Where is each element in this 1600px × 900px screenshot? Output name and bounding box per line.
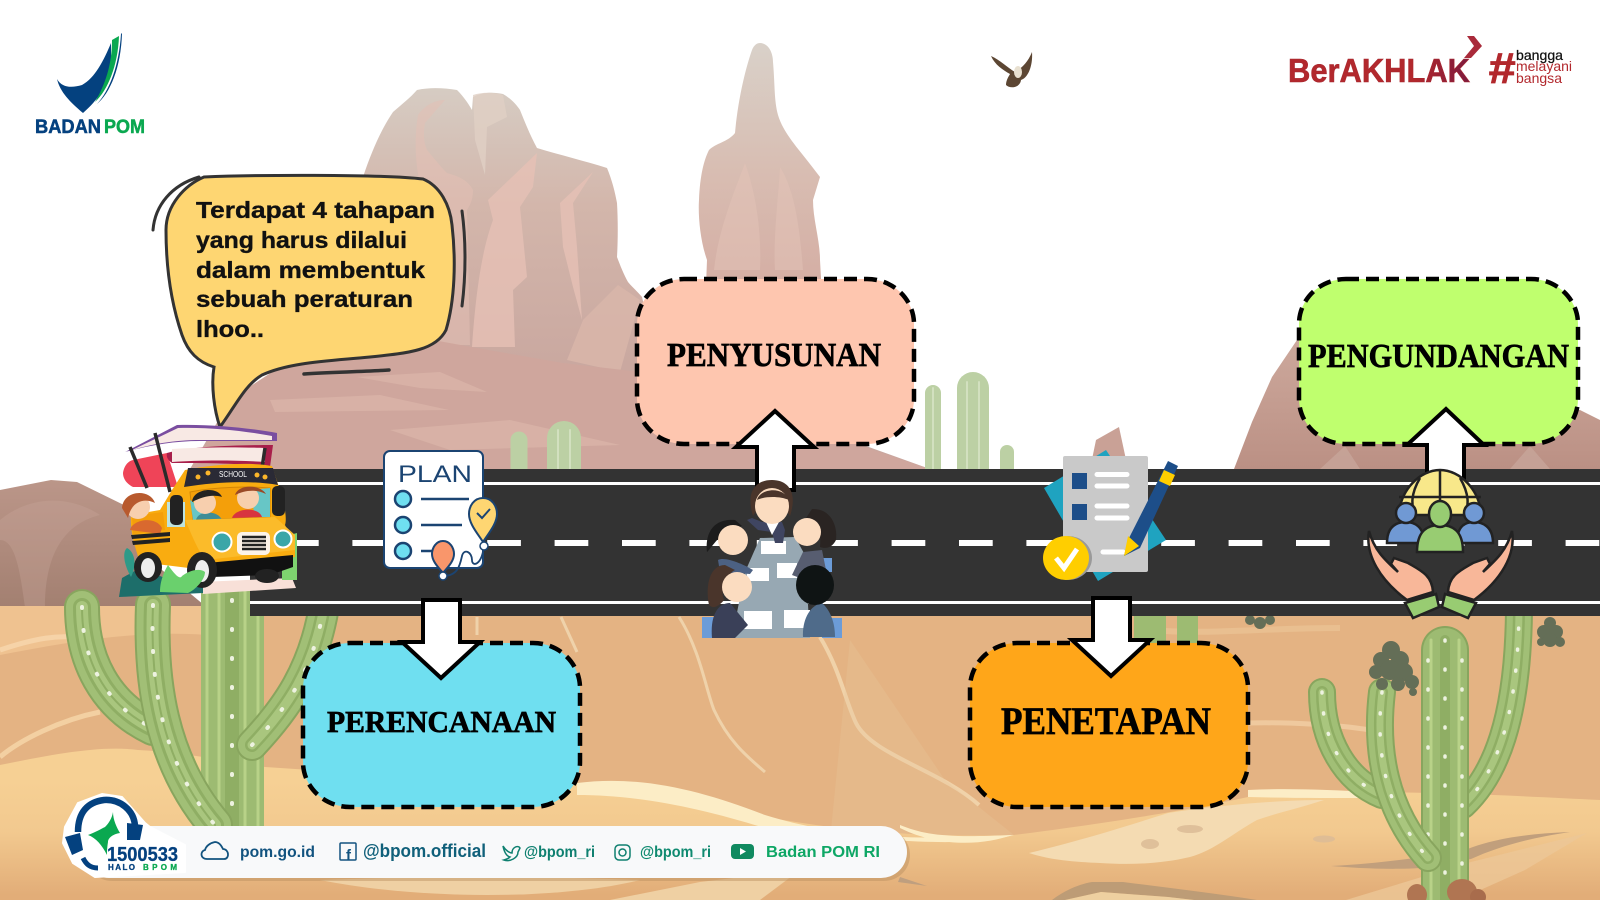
icon: school bus with books: SCHOOL [219, 470, 247, 479]
box: pengundangan [1299, 279, 1578, 444]
icon: facebook [340, 843, 356, 864]
background: far cacti [519, 382, 1007, 480]
box: pengundangan: PENGUNDANGAN [1308, 338, 1569, 375]
icon: instagram [615, 845, 630, 860]
bubble text [196, 197, 435, 342]
bubble text: lhoo.. [196, 316, 264, 342]
hotline logo: HALO [108, 863, 135, 872]
instagram handle: @bpom_ri [640, 844, 711, 861]
website: pom.go.id [240, 844, 315, 861]
logo: berakhlak: # [1488, 44, 1516, 93]
speech bubble [153, 175, 465, 427]
logo: berakhlak: melayani [1516, 58, 1572, 74]
big cactus: left [82, 590, 325, 840]
icon: hands holding public [1368, 470, 1513, 618]
hotline logo [63, 794, 185, 877]
logo: berakhlak: BerAKHLAK [1288, 52, 1470, 89]
icon: cloud [201, 842, 228, 859]
icon: checklist document and pen [1043, 450, 1178, 581]
box: penyusunan [637, 279, 914, 444]
road [250, 469, 1600, 616]
bubble text: sebuah peraturan [196, 286, 413, 312]
icon: flying bird [991, 52, 1032, 87]
hotline logo: 1500533 [107, 844, 178, 866]
box: penyusunan: PENYUSUNAN [667, 337, 881, 374]
box: perencanaan: PERENCANAAN [327, 704, 556, 739]
arrow: plan to perencanaan [402, 600, 480, 678]
facebook handle: @bpom.official [363, 841, 486, 861]
box: penetapan [970, 643, 1248, 807]
background: left rock [0, 480, 210, 612]
logo: berakhlak: bangga [1516, 47, 1563, 63]
box: perencanaan [303, 643, 580, 807]
background: right rocks [1090, 300, 1600, 469]
icon: facebook: f [346, 847, 352, 864]
icon: school bus with books [119, 425, 297, 597]
shrubs [1134, 615, 1565, 696]
icon: twitter [503, 846, 520, 861]
arrow: meeting to penyusunan [736, 411, 814, 490]
logo: badan pom: BADAN [35, 117, 101, 138]
arrow: public to pengundangan [1407, 409, 1484, 480]
icon: plan checklist: PLAN [398, 461, 472, 488]
arrow: checklist to penetapan [1072, 598, 1150, 676]
box: penetapan: PENETAPAN [1001, 700, 1211, 743]
twitter handle: @bpom_ri [524, 844, 595, 861]
big cactus: right [1322, 610, 1519, 900]
logo: berakhlak: bangsa [1516, 70, 1562, 86]
bubble text: Terdapat 4 tahapan [196, 197, 435, 223]
icon: youtube [731, 844, 754, 859]
youtube channel: Badan POM RI [766, 844, 880, 861]
icon: plan checklist [384, 451, 497, 580]
background: rock spire [699, 43, 830, 440]
footer contact bar [63, 794, 910, 881]
icon: team meeting [702, 480, 842, 638]
bubble text: dalam membentuk [196, 257, 425, 283]
logo: badan pom: POM [104, 117, 145, 138]
background: central rock mountain [190, 43, 930, 469]
background: desert sand [0, 606, 1600, 900]
bubble text: yang harus dilalui [196, 227, 407, 253]
hotline logo: BPOM [143, 863, 177, 872]
logo: badan pom [35, 33, 145, 138]
logo: berakhlak [1288, 36, 1572, 93]
